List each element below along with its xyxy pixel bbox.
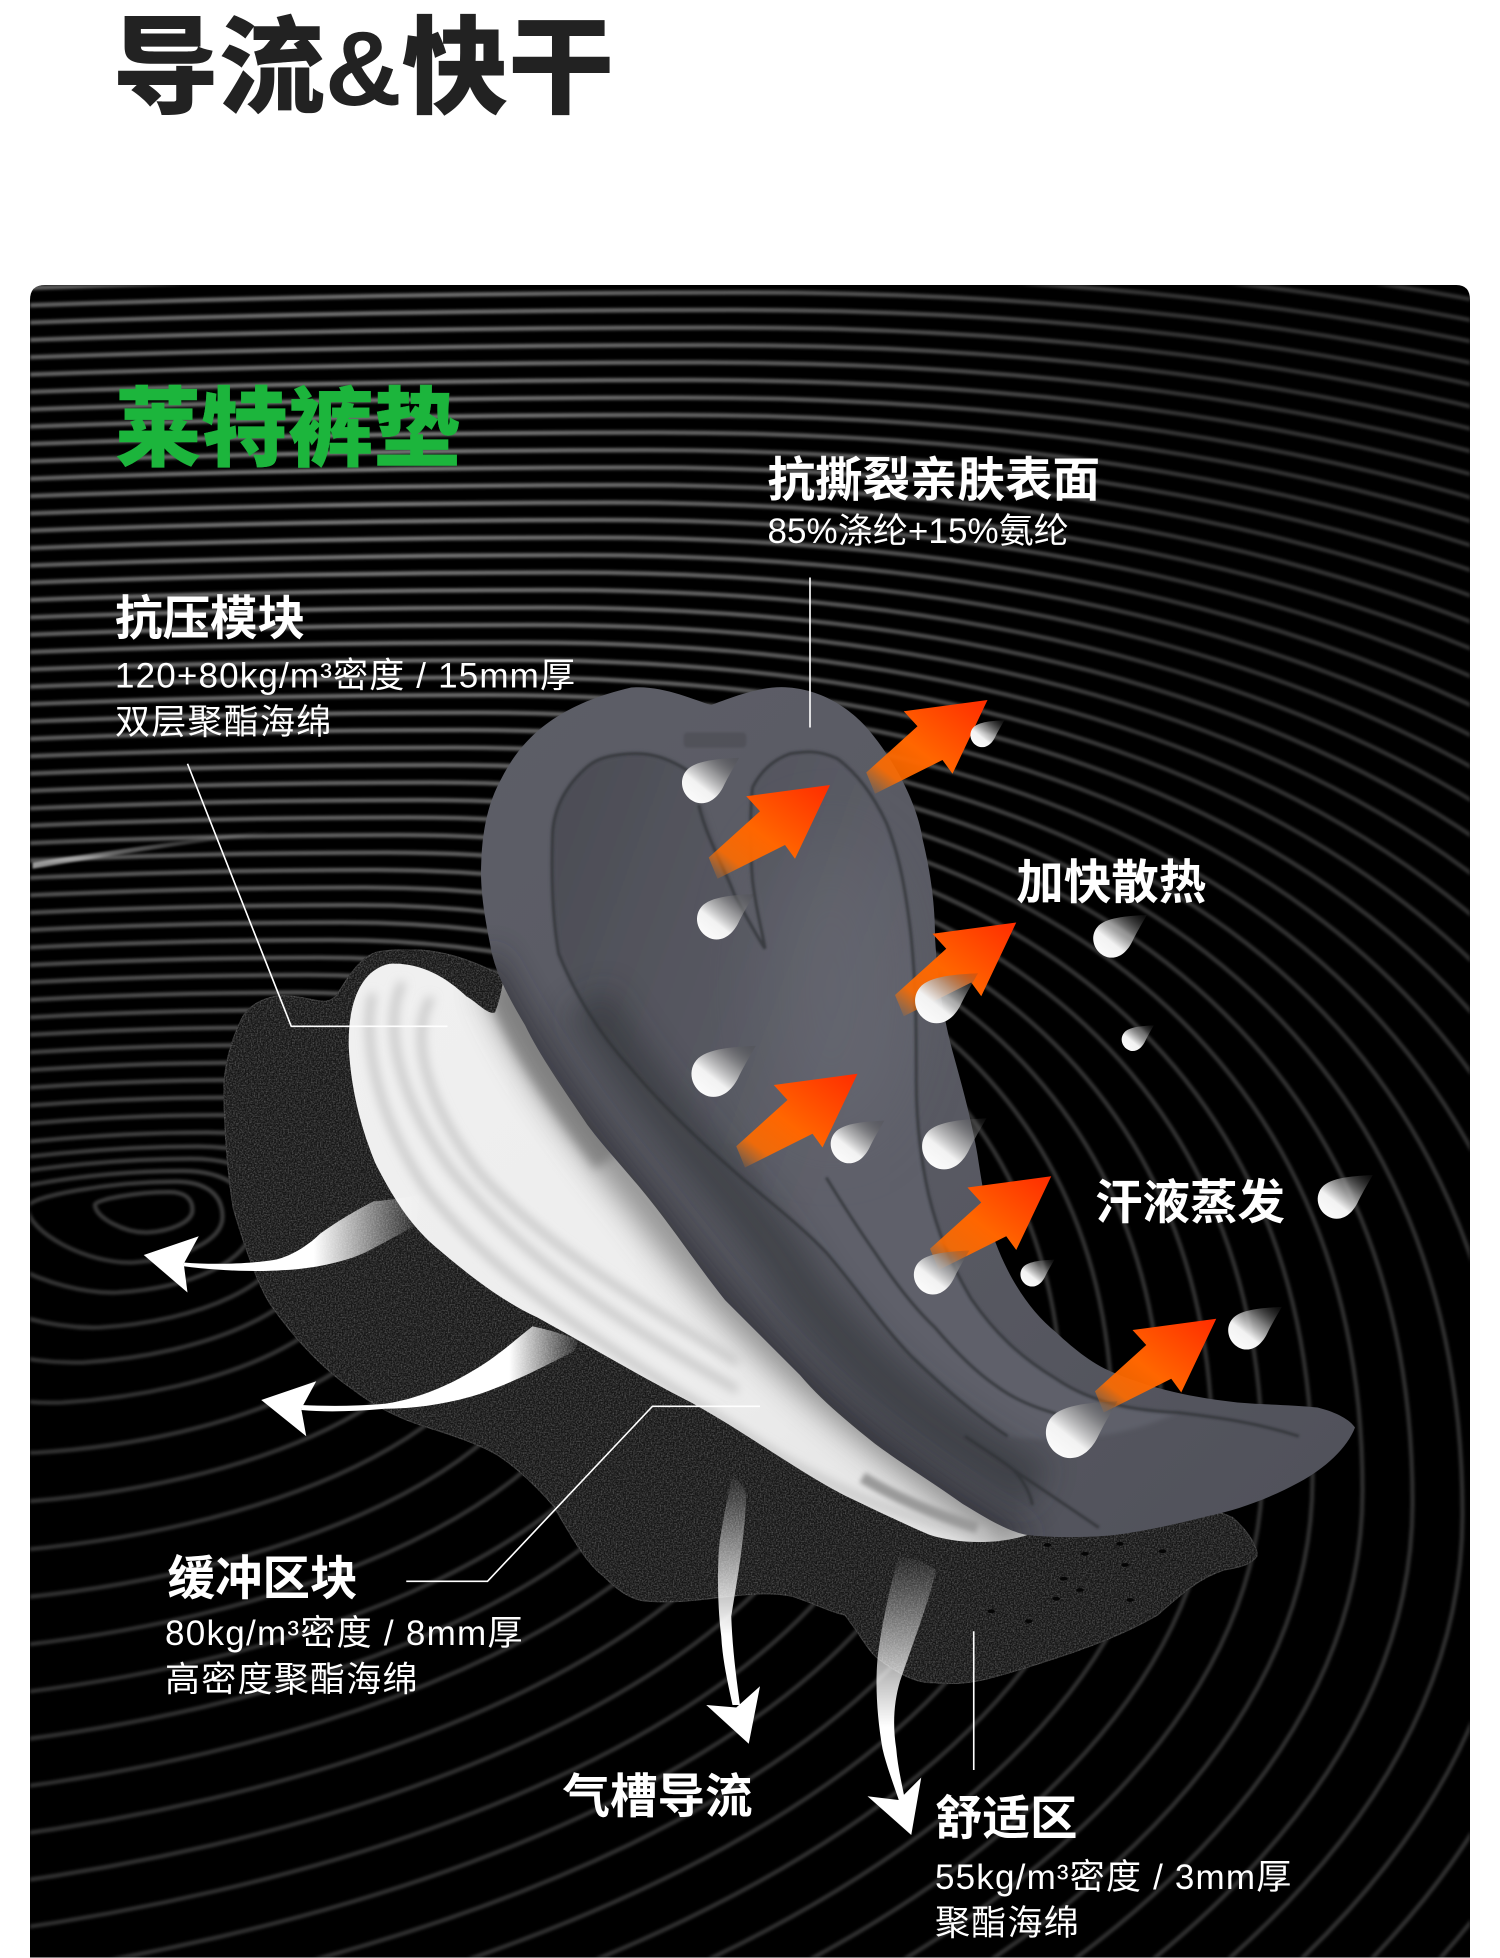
label: compression module: 双层聚酯海绵: [115, 703, 331, 742]
leader line: comfort zone: [973, 1631, 975, 1770]
label: air channel flow: 气槽导流: [563, 1771, 752, 1824]
label: cushioning block: 高密度聚酯海绵: [165, 1660, 418, 1699]
label: comfort zone: 舒适区: [935, 1793, 1077, 1846]
label: comfort zone: [935, 1793, 1291, 1943]
page title: 导流&快干: [113, 9, 614, 128]
label: comfort zone: 55kg/m³密度 / 3mm厚: [935, 1858, 1291, 1897]
airflow arrow: right down: [868, 1556, 936, 1835]
leader line: cushioning block: [406, 1406, 760, 1581]
label: tear-resistant skin-friendly surface: 85%涤纶+15%氨纶: [767, 512, 1069, 551]
heat arrow 3: [895, 922, 1016, 1016]
label: cushioning block: 80kg/m³密度 / 8mm厚: [165, 1614, 523, 1653]
label: comfort zone: 聚酯海绵: [935, 1904, 1079, 1943]
airflow arrow: left lower: [261, 1326, 579, 1436]
cushioning layer (white): [349, 964, 1028, 1542]
comfort foam layer (black): [224, 950, 1258, 1684]
heat arrow 1: [866, 700, 988, 794]
heat arrow 2: [709, 785, 830, 879]
sweat droplets: [682, 720, 1373, 1458]
label: sweat evaporation: 汗液蒸发: [1095, 1177, 1285, 1230]
label: tear-resistant skin-friendly surface: 抗撕裂亲肤表面: [767, 454, 1100, 507]
label: tear-resistant skin-friendly surface: [768, 454, 1100, 551]
leader line: compression module: [188, 764, 448, 1026]
heat arrow 6: [1095, 1319, 1216, 1412]
heat arrow 4: [736, 1074, 858, 1168]
label: compression module: [115, 593, 575, 742]
leader line: tear-resistant surface: [809, 578, 811, 728]
label: faster heat dissipation: 加快散热: [1016, 857, 1206, 910]
panel heading: 莱特裤垫: [115, 382, 460, 478]
label: compression module: 抗压模块: [115, 593, 305, 646]
label: cushioning block: [165, 1553, 523, 1699]
skin-contact pad (grey): [475, 687, 1355, 1550]
label: cushioning block: 缓冲区块: [168, 1553, 358, 1606]
label: compression module: 120+80kg/m³密度 / 15mm厚: [115, 657, 575, 696]
heat arrow 5: [930, 1176, 1051, 1270]
airflow arrow: left upper: [144, 1195, 420, 1292]
airflow arrow: centre down: [706, 1475, 760, 1744]
